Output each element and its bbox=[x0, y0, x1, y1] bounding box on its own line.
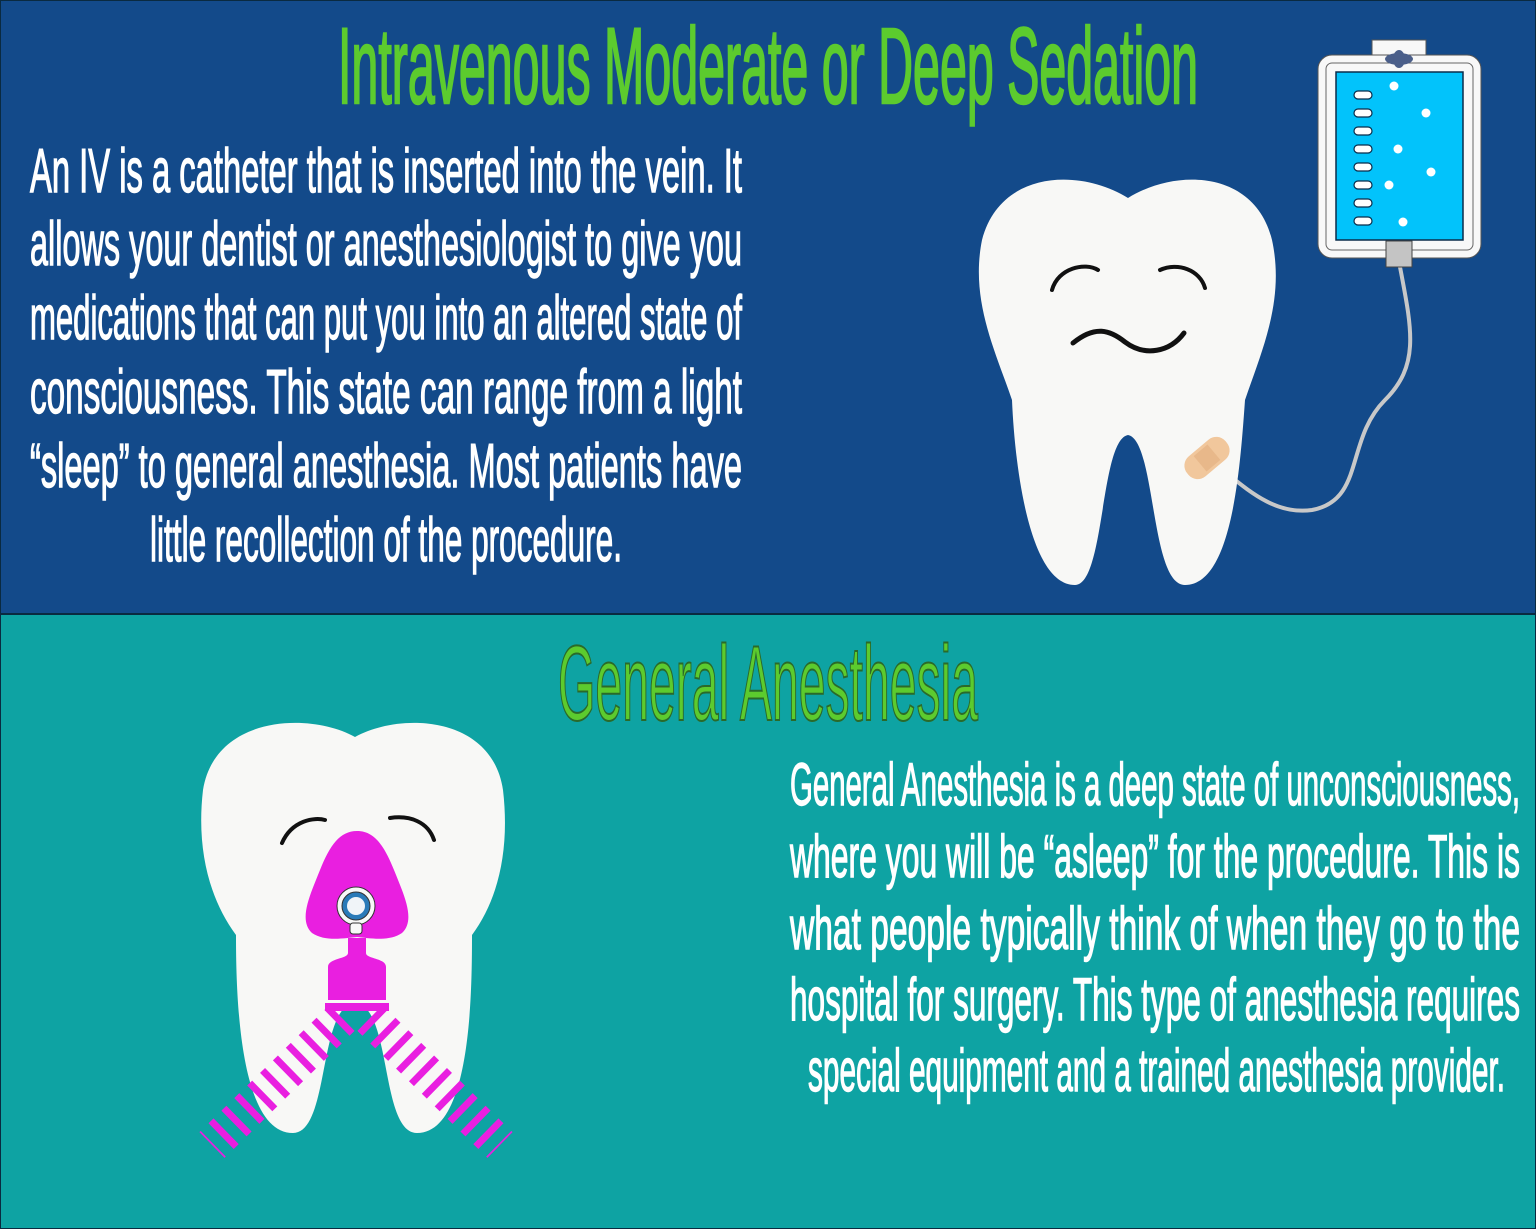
text block: IV description: little recollection of the procedure. bbox=[150, 506, 622, 575]
icon: IV bag bbox=[1318, 40, 1481, 267]
icon: bandage bbox=[1179, 432, 1235, 484]
text block: IV description: “sleep” to general anesthesia. Most patients have bbox=[30, 432, 742, 501]
text block: IV description: medications that can put you into an altered state of bbox=[30, 284, 742, 353]
icon: tooth with anesthesia mask bbox=[201, 723, 505, 1145]
panel: general anesthesia background bbox=[0, 614, 1536, 1229]
text: General Anesthesia bbox=[558, 623, 978, 743]
text block: IV description: allows your dentist or anesthesiologist to give you bbox=[30, 210, 742, 279]
text block: IV description bbox=[30, 137, 742, 575]
icon: breathing tubes bbox=[212, 1018, 500, 1145]
text block: IV description: consciousness. This state can range from a light bbox=[30, 358, 742, 427]
panel: IV sedation background bbox=[0, 0, 1536, 614]
icon: tooth with IV bbox=[979, 180, 1276, 585]
icon: mask bbox=[306, 831, 408, 939]
icon: IV tube bbox=[1212, 267, 1410, 511]
text block: IV description: An IV is a catheter that is inserted into the vein. It bbox=[30, 137, 742, 206]
text block: general anesthesia description bbox=[789, 751, 1520, 1104]
